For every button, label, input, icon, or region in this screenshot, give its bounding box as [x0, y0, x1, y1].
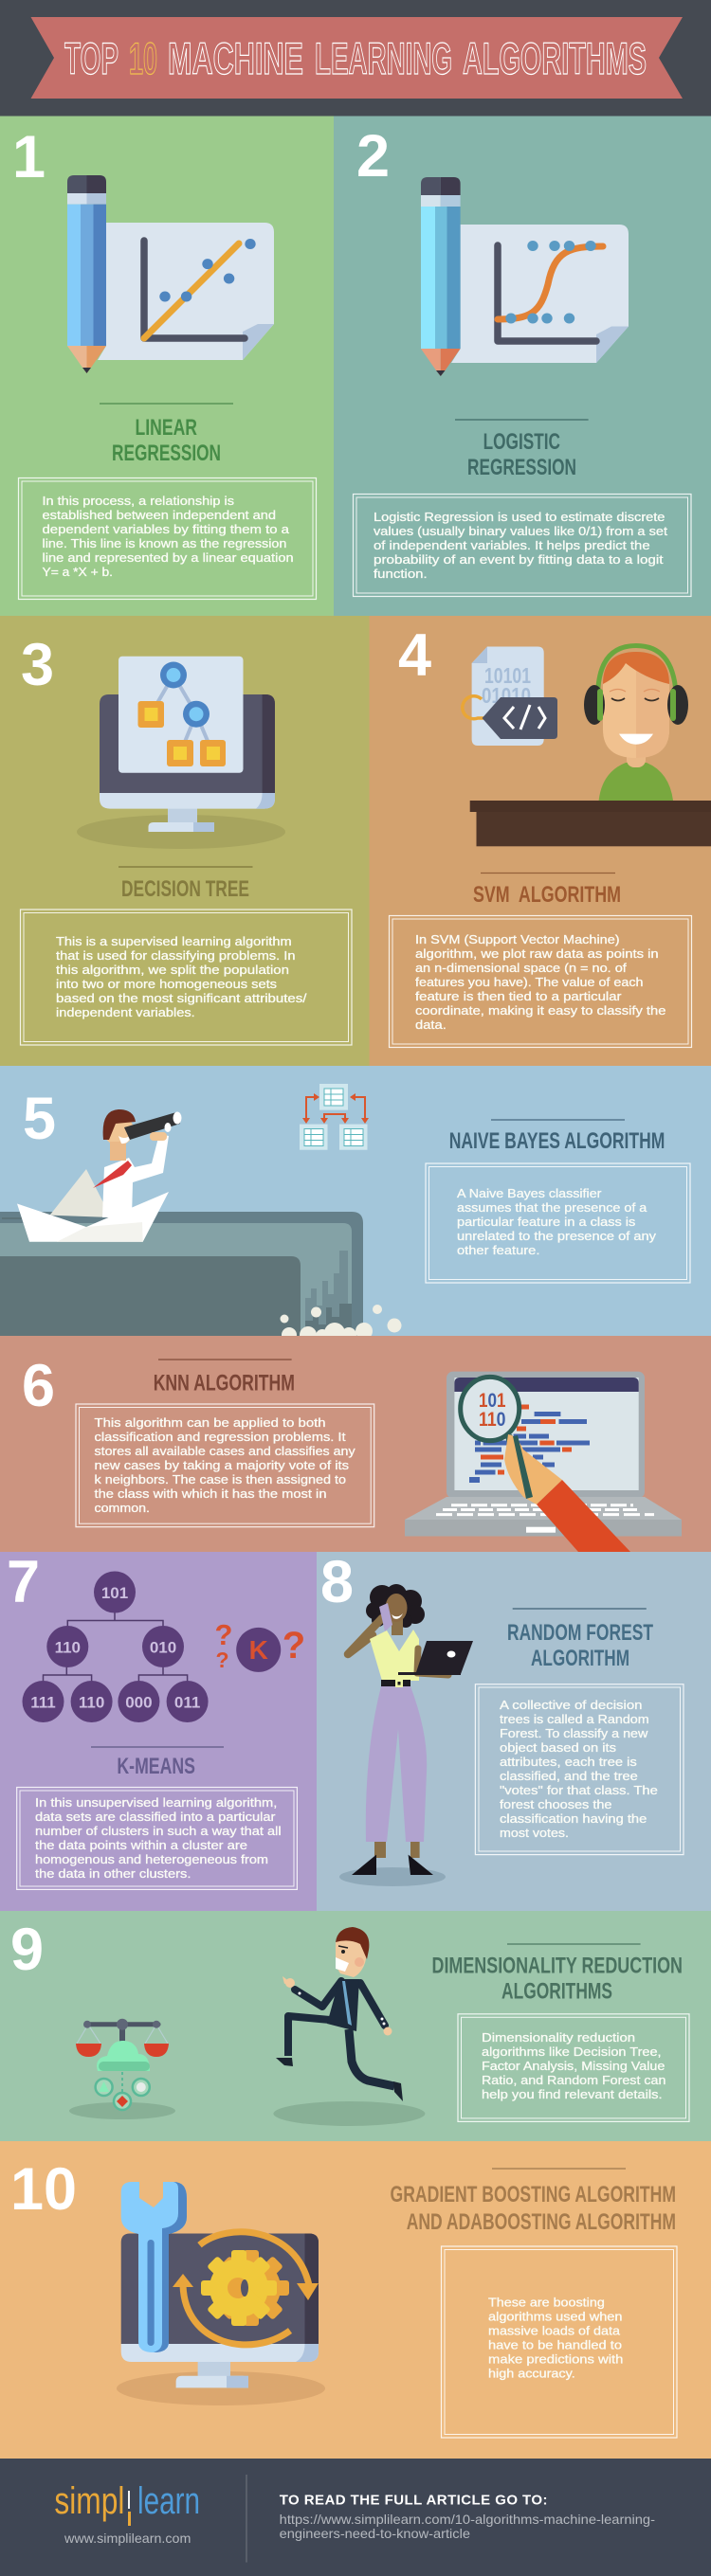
- heading: logistic regression: LOGISTIC: [483, 429, 560, 455]
- icon: chart paper with pencil: [67, 175, 274, 373]
- website url: www.simplilearn.com: [64, 2531, 191, 2546]
- text box 7: homogenous and heterogeneous from: [35, 1852, 268, 1866]
- text box 3: that is used for classifying problems. In: [56, 948, 296, 963]
- text box 4: an n-dimensional space (n = no. of: [415, 961, 627, 975]
- number 8: 8: [320, 1549, 354, 1615]
- heading: k-means: K-MEANS: [117, 1754, 195, 1779]
- text box 2: of independent variables. It helps predict the: [374, 538, 650, 552]
- text box 2: function.: [374, 567, 428, 581]
- illustration: smiling operator with headset at desk: [470, 646, 711, 846]
- logo: simplilearn: learn: [137, 2480, 200, 2522]
- text box 8: attributes, each tree is: [500, 1755, 637, 1769]
- chart: binary cluster tree: [23, 1571, 209, 1722]
- title: 10: [129, 33, 157, 83]
- chart: binary cluster tree: 110: [79, 1694, 104, 1711]
- panel 5: naive bayes: [0, 1066, 711, 1343]
- text box 9: Factor Analysis, Missing Value: [482, 2059, 665, 2073]
- illustration: laptop with code and magnifier: [405, 1372, 682, 1552]
- icon: binary document with code tag: 01010: [482, 683, 531, 708]
- heading: linear regression: [100, 404, 233, 466]
- icon: K with question marks: K: [249, 1635, 268, 1665]
- text box 10: algorithms used when: [488, 2310, 622, 2323]
- text box 8: most votes.: [500, 1826, 569, 1840]
- panel 2: logistic regression: [334, 116, 711, 616]
- number 7: 7: [7, 1549, 40, 1615]
- text box 5: unrelated to the presence of any: [457, 1229, 657, 1243]
- illustration: running businessman: [273, 1927, 425, 2126]
- number 6: 6: [22, 1353, 55, 1419]
- icon: cloud on balance scale: [69, 2019, 175, 2119]
- text box 6: [76, 1404, 374, 1527]
- footer: [0, 2459, 711, 2576]
- icon: binary document with code tag: [463, 646, 557, 746]
- heading: decision tree: DECISION TREE: [121, 876, 249, 902]
- panel 4: svm algorithm: [370, 616, 711, 1066]
- panel 9: dimensionality reduction: [0, 1911, 711, 2141]
- text box 3: based on the most significant attributes/: [56, 991, 307, 1005]
- text box 1: line and represented by a linear equation: [42, 550, 294, 565]
- text box 3: This is a supervised learning algorithm: [56, 934, 292, 948]
- heading: logistic regression: REGRESSION: [467, 455, 576, 480]
- panel 3: decision tree: [0, 616, 370, 1066]
- icon: K with question marks: ?: [215, 1618, 232, 1651]
- text box 10: [442, 2246, 677, 2438]
- illustration: laptop with code and magnifier: 110: [479, 1409, 506, 1431]
- panel 8: random forest: [317, 1549, 711, 1911]
- text box 4: data.: [415, 1018, 447, 1032]
- text box 2: [353, 495, 691, 597]
- text box 4: coordinate, making it easy to classify the: [415, 1003, 665, 1018]
- text box 10: make predictions with: [488, 2351, 623, 2367]
- heading: knn algorithm: KNN ALGORITHM: [154, 1371, 295, 1396]
- title: TOP: [64, 33, 118, 83]
- heading: random forest algorithm: [507, 1609, 653, 1671]
- text box 9: algorithms like Decision Tree,: [482, 2045, 662, 2059]
- text box 8: forest chooses the: [500, 1797, 612, 1811]
- text box 5: A Naive Bayes classifier: [457, 1186, 602, 1200]
- heading: svm algorithm: SVM ALGORITHM: [473, 882, 621, 908]
- logo: simplilearn: simpl: [54, 2480, 124, 2522]
- illustration: businessman with binoculars on paper boat: [17, 1109, 182, 1242]
- text box 9: Ratio, and Random Forest can: [482, 2073, 665, 2087]
- icon: linked data tables: [300, 1084, 369, 1150]
- heading: gradient boosting and adaboosting: [391, 2169, 676, 2235]
- text box 6: This algorithm can be applied to both: [95, 1415, 326, 1430]
- panel 7: k-means: [0, 1549, 317, 1911]
- text box 6: k neighbors. The case is then assigned to: [95, 1472, 346, 1486]
- title: MACHINE: [168, 33, 303, 83]
- text box 1: dependent variables by fitting them to a: [42, 522, 290, 536]
- text box 3: this algorithm, we split the population: [56, 963, 289, 977]
- text box 7: [17, 1787, 297, 1889]
- chart: binary cluster tree: 011: [174, 1694, 200, 1711]
- text box 1: Y= a *X + b.: [42, 565, 113, 579]
- text box 4: features you have). The value of each: [415, 975, 643, 989]
- number 3: 3: [21, 632, 54, 698]
- icon: K with question marks: [215, 1618, 305, 1672]
- text box 6: classification and regression problems. It: [95, 1430, 346, 1444]
- illustration: water tank edge with foam: [0, 1212, 402, 1343]
- text box 8: Forest. To classify a new: [500, 1726, 648, 1740]
- chart: binary cluster tree: 010: [150, 1639, 176, 1656]
- heading: random forest algorithm: RANDOM FOREST: [507, 1620, 653, 1646]
- text box 8: A collective of decision: [500, 1698, 643, 1712]
- text box 1: [19, 477, 317, 599]
- text box 8: classified, and the tree: [500, 1769, 638, 1783]
- heading: k-means: [91, 1747, 224, 1779]
- heading: logistic regression: [455, 420, 589, 480]
- illustration: woman with phone and laptop: [339, 1584, 473, 1886]
- panel 10: gradient boosting: [0, 2141, 711, 2459]
- call to action: [280, 2492, 655, 2541]
- number 2: 2: [356, 123, 390, 189]
- icon: s-curve paper with pencil: [421, 177, 629, 376]
- text box 1: line. This line is known as the regression: [42, 536, 286, 550]
- illustration: laptop with code and magnifier: 101: [479, 1390, 506, 1412]
- text box 5: [426, 1163, 690, 1283]
- text box 8: trees is called a Random: [500, 1712, 649, 1726]
- icon: monitor with wrench and gear: [117, 2182, 325, 2405]
- text box 7: the data points within a cluster are: [35, 1838, 247, 1852]
- text box 3: into two or more homogeneous sets: [56, 977, 278, 991]
- icon: K with question marks: ?: [283, 1625, 305, 1666]
- panel 1: linear regression: [0, 116, 334, 616]
- text box 10: have to be handled to: [488, 2338, 622, 2351]
- text box 10: high accuracy.: [488, 2367, 575, 2380]
- text box 5: particular feature in a class is: [457, 1215, 636, 1229]
- number 5: 5: [23, 1086, 56, 1152]
- chart: binary cluster tree: 000: [125, 1694, 153, 1711]
- chart: binary cluster tree: 101: [101, 1584, 128, 1602]
- text box 6: new cases by taking a majority vote of its: [95, 1458, 350, 1472]
- heading: dimensionality reduction algorithms: [432, 1944, 683, 2005]
- text box 8: [475, 1684, 684, 1855]
- heading: dimensionality reduction algorithms: ALGORITHMS: [501, 1978, 612, 2005]
- text box 3: independent variables.: [56, 1005, 195, 1019]
- heading: random forest algorithm: ALGORITHM: [531, 1646, 629, 1671]
- text box 2: probability of an event by fitting data to a logit: [374, 552, 664, 567]
- text box 7: the data in other clusters.: [35, 1866, 191, 1881]
- title: LEARNING: [315, 33, 452, 83]
- number 4: 4: [398, 622, 431, 689]
- number 9: 9: [10, 1917, 44, 1983]
- title ribbon: [30, 17, 683, 99]
- text box 6: common.: [95, 1501, 150, 1515]
- text box 4: In SVM (Support Vector Machine): [415, 932, 620, 946]
- header band: [0, 0, 711, 116]
- title: [64, 33, 647, 83]
- icon: monitor with tree: [77, 657, 285, 849]
- heading: linear regression: REGRESSION: [112, 441, 221, 466]
- chart: binary cluster tree: 111: [30, 1694, 56, 1711]
- heading: linear regression: LINEAR: [135, 415, 197, 441]
- text box 3: [21, 910, 352, 1045]
- call to action: https://www.simplilearn.com/10-algorithms-machine-learning-: [280, 2512, 655, 2527]
- text box 9: [458, 2014, 689, 2121]
- text box 9: help you find relevant details.: [482, 2087, 663, 2101]
- icon: K with question marks: ?: [215, 1648, 229, 1672]
- text box 1: established between independent and: [42, 508, 276, 522]
- call to action: engineers-need-to-know-article: [280, 2526, 470, 2541]
- number 10: 10: [10, 2156, 77, 2223]
- text box 8: object based on its: [500, 1740, 617, 1755]
- text box 8: classification having the: [500, 1811, 647, 1826]
- icon: binary document with code tag: 10101: [484, 663, 531, 688]
- text box 2: Logistic Regression is used to estimate discrete: [374, 510, 665, 524]
- text box 6: stores all available cases and classifies any: [95, 1444, 356, 1458]
- logo: simplilearn: [54, 2480, 200, 2526]
- text box 10: massive loads of data: [488, 2323, 621, 2338]
- text box 7: data sets are classified into a particular: [35, 1810, 276, 1824]
- text box 9: Dimensionality reduction: [482, 2030, 635, 2045]
- text box 2: values (usually binary values like 0/1) from a set: [374, 524, 667, 538]
- text box 5: assumes that the presence of a: [457, 1200, 647, 1215]
- number 1: 1: [12, 124, 46, 190]
- text box 4: algorithm, we plot raw data as points in: [415, 946, 659, 961]
- text box 8: "votes" for that class. The: [500, 1783, 658, 1797]
- text box 4: feature is then tied to a particular: [415, 989, 622, 1003]
- text box 6: the class with which it has the most in: [95, 1486, 326, 1501]
- text box 5: other feature.: [457, 1243, 539, 1257]
- text box 4: [389, 915, 692, 1048]
- text box 7: number of clusters in such a way that all: [35, 1824, 282, 1838]
- text box 1: In this process, a relationship is: [42, 494, 235, 508]
- panel 6: knn algorithm: [0, 1336, 711, 1552]
- text box 7: In this unsupervised learning algorithm,: [35, 1795, 277, 1810]
- chart: binary cluster tree: 110: [55, 1639, 81, 1656]
- text box 10: These are boosting: [488, 2295, 605, 2310]
- call to action: TO READ THE FULL ARTICLE GO TO:: [280, 2492, 548, 2509]
